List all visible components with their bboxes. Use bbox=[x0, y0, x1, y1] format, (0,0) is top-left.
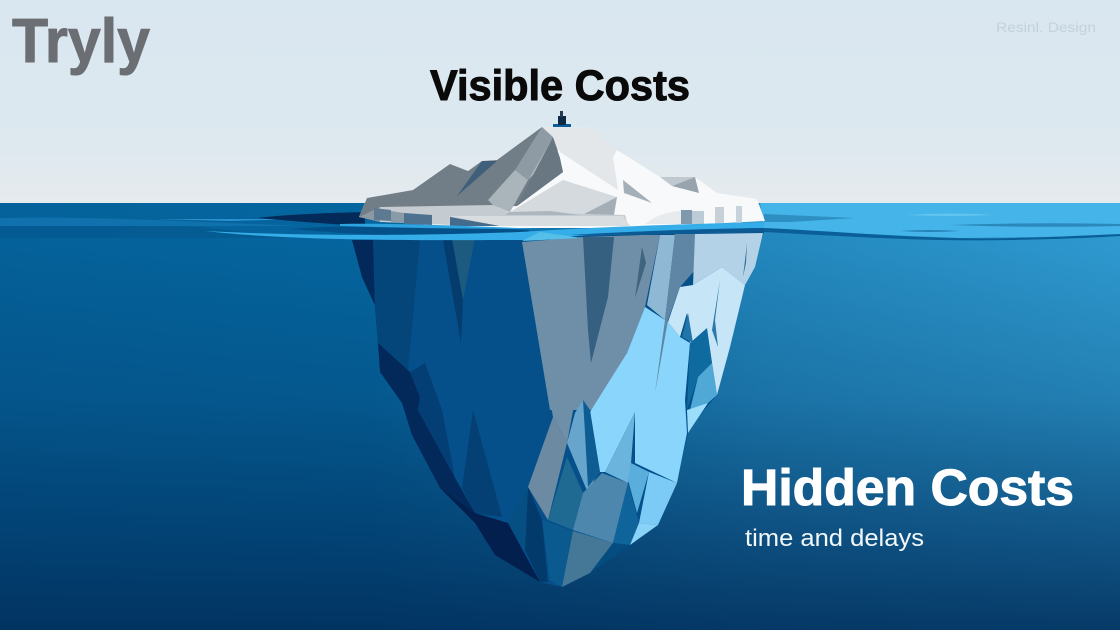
sky background bbox=[0, 0, 1120, 204]
heading: Visible Costs: Visible Costs bbox=[430, 62, 690, 110]
ocean bbox=[0, 203, 1120, 630]
iceberg below water bbox=[352, 232, 764, 587]
logo: Tryly: Tryly bbox=[12, 7, 150, 76]
icon: lighthouse on the iceberg peak bbox=[553, 111, 571, 127]
watermark: Resinl. Design: Resinl. Design bbox=[996, 20, 1096, 35]
iceberg above water bbox=[359, 127, 765, 228]
subheading: time and delays: time and delays bbox=[745, 525, 924, 552]
heading: Hidden Costs: Hidden Costs bbox=[741, 459, 1074, 516]
waterline ripples bbox=[205, 222, 1120, 241]
